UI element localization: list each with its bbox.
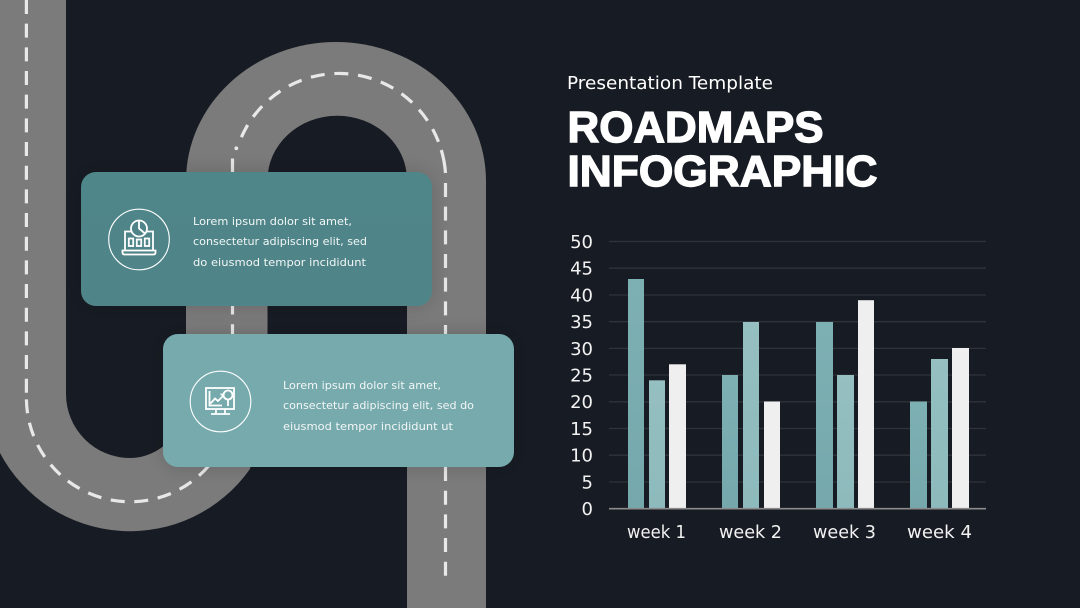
y axis labels: 15 <box>570 419 593 440</box>
y axis labels: 20 <box>570 392 593 413</box>
x axis labels: week 2 <box>719 522 782 543</box>
y axis labels: 50 <box>570 232 593 253</box>
card 1 text: do eiusmod tempor incididunt <box>193 256 367 269</box>
y axis labels: 10 <box>570 446 593 467</box>
icon: laptop with pie chart <box>109 209 169 270</box>
title: INFOGRAPHIC <box>568 147 878 196</box>
bars: week 2 <box>722 322 780 508</box>
x axis labels <box>627 522 972 543</box>
bar chart <box>570 232 986 543</box>
card 2 <box>163 334 514 467</box>
bars: week 4 <box>910 348 969 508</box>
subtitle: Presentation Template <box>567 73 773 94</box>
x axis labels: week 3 <box>813 522 876 543</box>
y axis labels: 30 <box>570 339 593 360</box>
card 1 text: consectetur adipiscing elit, sed <box>193 235 367 248</box>
y axis labels: 0 <box>582 499 593 520</box>
card 1 <box>81 172 432 306</box>
road: winding roadmap path <box>0 0 486 608</box>
y axis labels: 35 <box>570 312 593 333</box>
icon: monitor with growth chart <box>190 371 251 432</box>
x axis labels: week 4 <box>907 522 972 543</box>
title: ROADMAPS <box>568 103 824 152</box>
card 2 text: consectetur adipiscing elit, sed do <box>283 399 474 412</box>
card 2 text: eiusmod tempor incididunt ut <box>283 420 454 433</box>
bars: week 3 <box>816 300 874 508</box>
y axis labels: 45 <box>570 259 593 280</box>
x axis labels: week 1 <box>627 522 686 543</box>
road centre dashes <box>26 0 446 578</box>
y axis labels: 40 <box>570 285 593 306</box>
bars: week 1 <box>628 279 686 508</box>
card 2 text <box>283 379 474 433</box>
title <box>568 103 878 196</box>
y axis labels: 5 <box>582 472 593 493</box>
y axis labels: 25 <box>570 366 593 386</box>
card 1 text <box>193 215 367 269</box>
y axis labels <box>570 232 593 520</box>
card 2 text: Lorem ipsum dolor sit amet, <box>283 379 441 392</box>
card 1 text: Lorem ipsum dolor sit amet, <box>193 215 352 228</box>
